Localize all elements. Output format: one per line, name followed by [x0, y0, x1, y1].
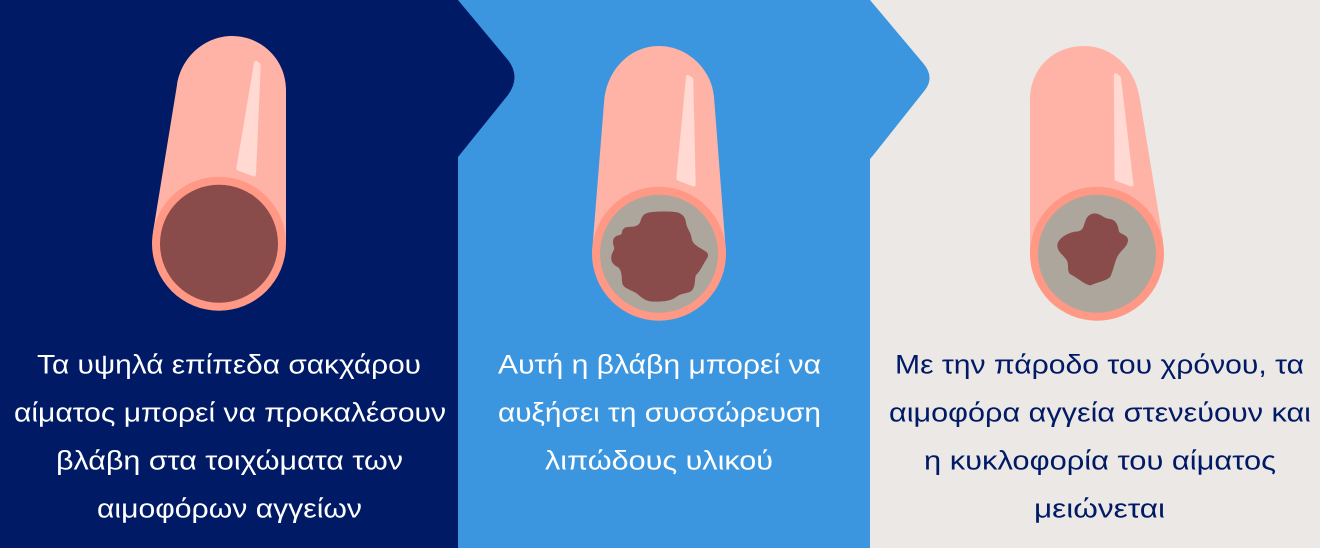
text: damage description: Τα υψηλά επίπεδα σακχάρου: [37, 350, 421, 380]
text: narrowing description: [889, 350, 1311, 524]
blood channel: [611, 212, 708, 302]
plaque: [1038, 195, 1156, 313]
text: narrowing description: Με την πάροδο του χρόνου, τα: [895, 350, 1304, 380]
text: buildup description: Αυτή η βλάβη μπορεί να: [498, 350, 821, 380]
narrow blood channel: [1057, 213, 1128, 285]
blood channel: [160, 185, 278, 303]
text: damage description: [14, 350, 446, 524]
text: buildup description: λιπώδους υλικού: [545, 446, 773, 476]
vessel body: [592, 46, 726, 253]
text: buildup description: αυξήσει τη συσσώρευση: [498, 398, 821, 428]
text: narrowing description: μειώνεται: [1034, 494, 1165, 524]
vessel wall ring: [1030, 187, 1164, 321]
vessel body: [1030, 46, 1163, 253]
text: narrowing description: η κυκλοφορία του αίματος: [924, 446, 1276, 476]
vessel wall ring: [592, 187, 726, 321]
text: damage description: αιμοφόρων αγγείων: [97, 494, 362, 524]
vessel highlight: [238, 63, 259, 174]
text: buildup description: [498, 350, 821, 476]
panel background with arrow: blue: [458, 0, 930, 548]
panel: fatty buildup: [458, 0, 930, 548]
text: narrowing description: αιμοφόρα αγγεία στενεύουν και: [889, 398, 1311, 428]
vessel wall ring: [152, 177, 286, 311]
icon: partially blocked blood vessel: [592, 46, 726, 321]
vessel body: [152, 36, 286, 244]
icon: heavily narrowed blood vessel: [1030, 46, 1164, 321]
icon: healthy blood vessel: [152, 36, 286, 311]
text: damage description: αίματος μπορεί να προκαλέσουν: [14, 398, 446, 428]
plaque: [600, 195, 718, 313]
vessel highlight: [678, 77, 694, 184]
vessel highlight: [1116, 75, 1132, 184]
panel: narrowed vessels: [870, 0, 1320, 548]
panel background: light grey: [870, 0, 1320, 548]
panel: vessel wall damage: [0, 0, 514, 548]
text: damage description: βλάβη στα τοιχώματα των: [56, 446, 403, 476]
panel background with arrow: navy: [0, 0, 514, 548]
